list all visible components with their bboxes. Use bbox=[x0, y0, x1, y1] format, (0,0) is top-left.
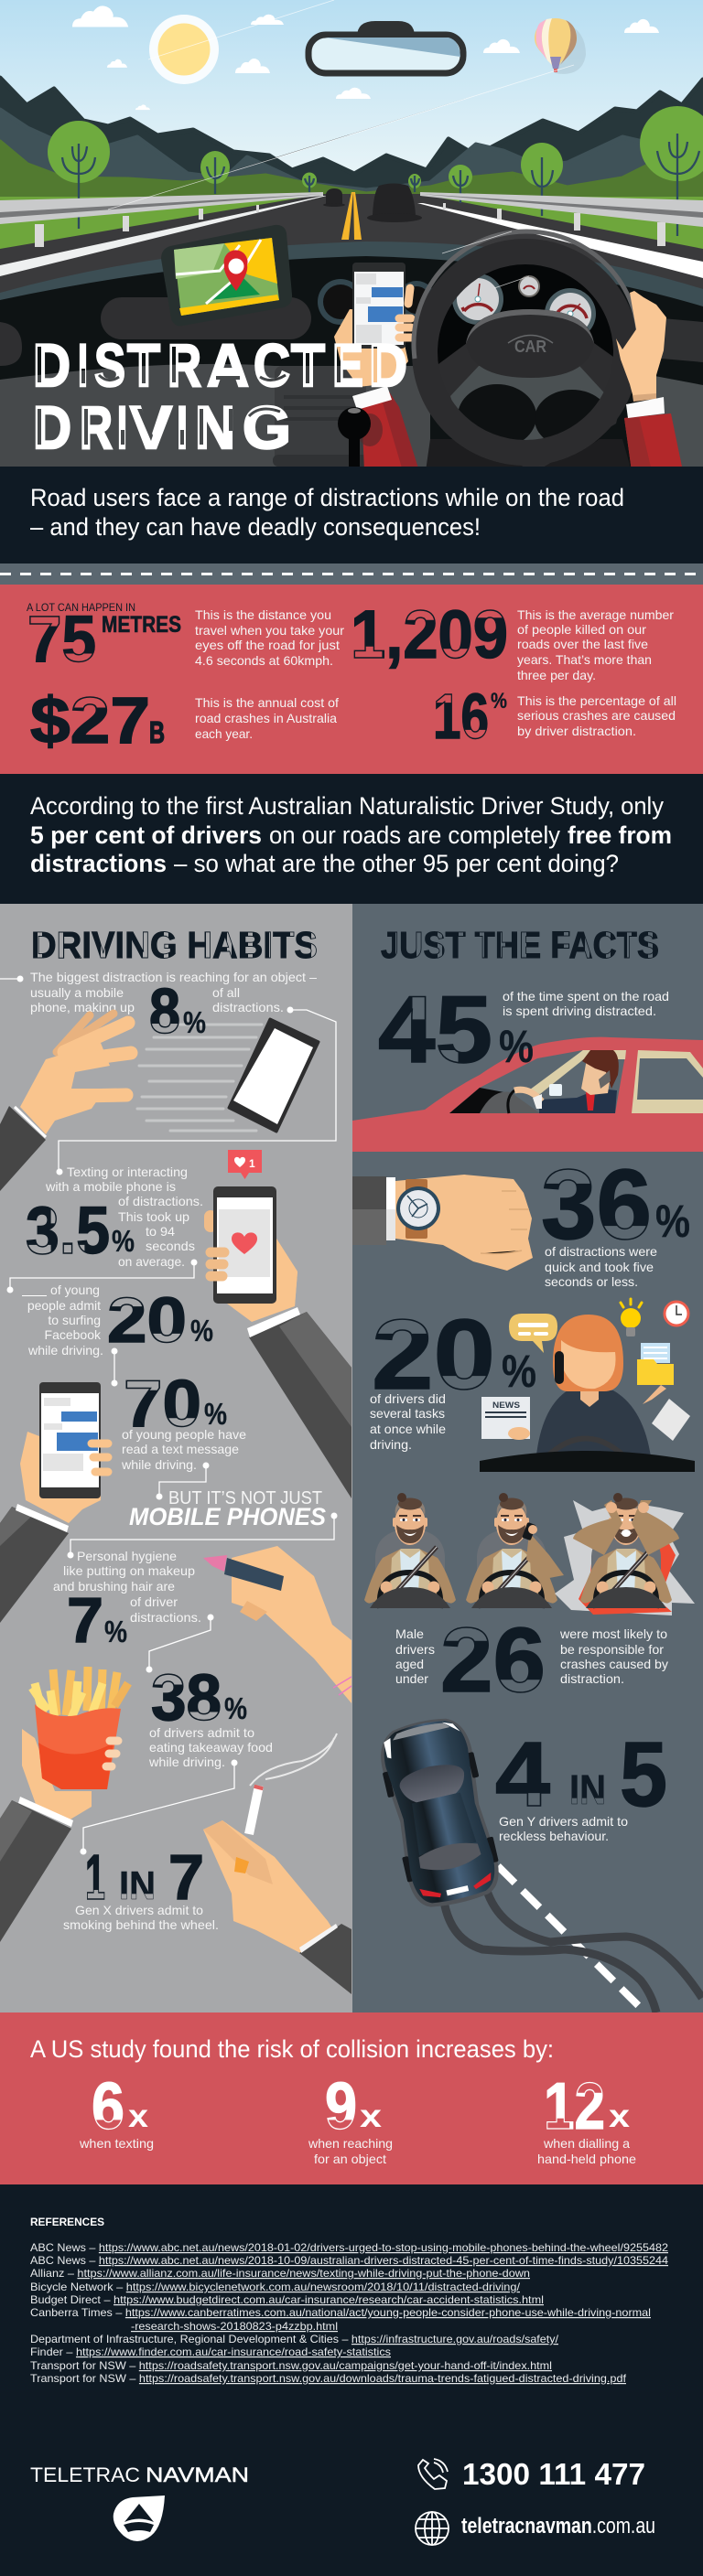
stat: 45%: 45 bbox=[378, 977, 492, 1083]
references: ABC News – https://www.abc.net.au/news/2018-10-09/australian-drivers-distracted-45-per-cent-of-time-finds-study/10355244 bbox=[30, 2254, 668, 2267]
stat: takeaway food 38%: while driving. bbox=[148, 1755, 225, 1769]
stat: personal hygiene 7%: % bbox=[104, 1615, 127, 1648]
stat: 9x when reaching: when reaching bbox=[308, 2136, 393, 2151]
study text bbox=[30, 792, 672, 877]
icon: hand with wrist watch bbox=[352, 1175, 533, 1271]
icon: clouds bbox=[72, 5, 659, 110]
icon: lipstick in hand bbox=[203, 1546, 352, 1703]
stat: $27B: $27 bbox=[30, 685, 150, 757]
title: D bbox=[33, 331, 70, 399]
stat: texting 3.5%: Texting or interacting bbox=[67, 1165, 188, 1179]
stat: male drivers under 26: were most likely to bbox=[559, 1626, 667, 1641]
icon: phone in hand reading text bbox=[0, 1382, 108, 1623]
intro text: – and they can have deadly consequences! bbox=[30, 513, 481, 541]
stat: 20% multitasking bbox=[370, 1299, 536, 1452]
icon: phone bbox=[418, 2459, 448, 2489]
icon: gauges bbox=[318, 279, 436, 325]
icon: cigarette in hand bbox=[203, 1733, 352, 1994]
icon: right hand and sleeve bbox=[616, 291, 683, 471]
stat: personal hygiene 7%: Personal hygiene bbox=[77, 1549, 177, 1563]
stat: 20% multitasking: at once while bbox=[370, 1422, 446, 1436]
title: T bbox=[291, 331, 325, 399]
stat: 75 metres: travel when you take your bbox=[195, 623, 344, 638]
stat: 4 in 5 bbox=[495, 1723, 667, 1843]
stat: 75 metres: 75 bbox=[27, 604, 96, 676]
stat: smoking 1 in 7 bbox=[63, 1841, 219, 1932]
stat: 36%: quick and took five bbox=[545, 1260, 654, 1274]
icon: car from above bbox=[373, 1712, 506, 1913]
stat: 12x when dialling: when dialling a bbox=[543, 2136, 630, 2151]
stat: texting 3.5%: % bbox=[112, 1224, 135, 1258]
stat: personal hygiene 7%: and brushing hair are bbox=[53, 1579, 175, 1594]
stat: Facebook 20%: 20 bbox=[107, 1284, 187, 1356]
references: Budget Direct – https://www.budgetdirect.com.au/car-insurance/research/car-accident-statistics.html bbox=[30, 2293, 544, 2306]
logo: Teletrac Navman wordmark: TELETRAC bbox=[30, 2463, 140, 2486]
stat: 16%: % bbox=[491, 689, 507, 714]
stat: Facebook 20%: Facebook bbox=[45, 1327, 102, 1342]
stat: smoking 1 in 7: Gen X drivers admit to bbox=[75, 1903, 203, 1917]
title: I bbox=[78, 331, 88, 399]
references: -research-shows-20180823-p4zzbp.html bbox=[131, 2320, 338, 2333]
stat: 1,209: 1,209 bbox=[351, 596, 508, 672]
panel: headline statistics bbox=[0, 585, 703, 774]
guard rails bbox=[0, 192, 703, 247]
icon: phone with heart notification: 1 bbox=[249, 1157, 255, 1170]
driver on phone bbox=[466, 1493, 564, 1608]
stat: Facebook 20%: to surfing bbox=[48, 1313, 101, 1327]
stat: takeaway food 38%: eating takeaway food bbox=[149, 1740, 273, 1755]
driver crashing bbox=[555, 1493, 695, 1615]
icon: red car with driver on phone bbox=[352, 1037, 703, 1152]
stat: 16%: by driver distraction. bbox=[517, 724, 636, 738]
dashboard bbox=[0, 242, 703, 471]
stat: 36%: seconds or less. bbox=[545, 1274, 638, 1289]
references: Transport for NSW – https://roadsafety.transport.nsw.gov.au/downloads/trauma-trends-fatigued-distracted-driving.pdf bbox=[30, 2372, 627, 2385]
title: R bbox=[80, 393, 113, 461]
icon: reaching hand and phone bbox=[0, 1014, 319, 1191]
stat: 6x when texting bbox=[79, 2070, 154, 2151]
heading: not just mobile phones bbox=[129, 1488, 326, 1530]
logo: Teletrac Navman wordmark bbox=[30, 2463, 249, 2486]
study text: – so what are the other 95 per cent doing? bbox=[174, 850, 619, 877]
stat: male drivers under 26: 26 bbox=[440, 1609, 546, 1712]
title: A bbox=[207, 331, 249, 399]
stat: 36%: of distractions were bbox=[545, 1244, 657, 1259]
stat: texting 3.5%: to 94 bbox=[146, 1224, 175, 1239]
study text: free from bbox=[568, 821, 672, 849]
stat: personal hygiene 7%: distractions. bbox=[130, 1610, 201, 1625]
stat: 12x when dialling: x bbox=[609, 2098, 631, 2134]
stat: 20% multitasking: driving. bbox=[370, 1437, 412, 1452]
intro text bbox=[30, 484, 624, 541]
stat: 36% bbox=[541, 1149, 690, 1289]
heading: not just mobile phones: BUT IT’S NOT JUST bbox=[168, 1488, 322, 1508]
stat: 20% multitasking: of drivers did bbox=[370, 1391, 446, 1406]
stat: 6x when texting: x bbox=[128, 2098, 149, 2134]
stat: smoking 1 in 7: 1 bbox=[85, 1841, 105, 1913]
stat: texting 3.5%: with a mobile phone is bbox=[45, 1179, 176, 1194]
stat: texting 3.5% bbox=[26, 1165, 203, 1269]
trees bbox=[48, 106, 703, 236]
stat: 70% read a text: read a text message bbox=[122, 1442, 239, 1456]
icon: phone with heart notification bbox=[204, 1150, 352, 1498]
stat: $27B: This is the annual cost of bbox=[195, 695, 339, 710]
stat: 8 percent bbox=[149, 975, 206, 1046]
stat: personal hygiene 7%: of driver bbox=[130, 1594, 178, 1609]
stat: 8 percent: 8 bbox=[149, 975, 180, 1046]
stat: 12x when dialling bbox=[537, 2070, 636, 2166]
icon: steering wheel: CAR bbox=[514, 338, 546, 356]
stat: male drivers under 26: crashes caused by bbox=[560, 1657, 668, 1671]
stat: 45%: % bbox=[499, 1021, 534, 1072]
stat: male drivers under 26: be responsible for bbox=[560, 1642, 664, 1657]
stat: smoking 1 in 7: IN bbox=[119, 1863, 156, 1908]
stat: 75 metres: 4.6 seconds at 60kmph. bbox=[195, 653, 333, 668]
panel: naturalistic driver study bbox=[0, 774, 703, 904]
references: Allianz – https://www.allianz.com.au/life-insurance/news/texting-while-driving-put-the-phone-down bbox=[30, 2267, 530, 2280]
stat: 70% read a text: of young people have bbox=[122, 1427, 246, 1442]
stat: 4 in 5: Gen Y drivers admit to bbox=[499, 1814, 628, 1829]
ground bbox=[0, 197, 703, 274]
references: Transport for NSW – https://roadsafety.transport.nsw.gov.au/campaigns/get-your-hand-off-it/index.html bbox=[30, 2359, 552, 2372]
panel: collision risk bbox=[0, 2012, 703, 2184]
stat: 36%: % bbox=[655, 1196, 690, 1247]
stat: 4 in 5: IN bbox=[569, 1766, 606, 1813]
heading: JUST THE FACTS bbox=[381, 924, 659, 966]
phone number: 1300 111 477 bbox=[462, 2457, 645, 2491]
stat: takeaway food 38% bbox=[148, 1662, 273, 1769]
icon: steering wheel bbox=[414, 231, 638, 473]
title: N bbox=[195, 393, 235, 461]
stat: texting 3.5%: on average. bbox=[118, 1254, 185, 1269]
stat: 70% read a text bbox=[121, 1368, 246, 1472]
intro text: Road users face a range of distractions while on the road bbox=[30, 484, 624, 511]
stat: 4 in 5: reckless behaviour. bbox=[499, 1829, 609, 1843]
panel: just the facts bbox=[352, 904, 703, 2012]
stat: male drivers under 26: under bbox=[395, 1671, 428, 1686]
stat: texting 3.5%: of distractions. bbox=[118, 1194, 203, 1208]
logo: Teletrac Navman emblem bbox=[114, 2496, 165, 2541]
stat: takeaway food 38%: % bbox=[224, 1691, 247, 1725]
title: E bbox=[332, 331, 363, 399]
stat: texting 3.5%: seconds bbox=[146, 1239, 195, 1253]
icon: sun bbox=[149, 15, 219, 84]
stat: 12x when dialling: hand-held phone bbox=[537, 2152, 636, 2166]
title: C bbox=[254, 331, 290, 399]
stat: 75 metres: METRES bbox=[102, 612, 181, 638]
stat: reaching 8%: usually a mobile bbox=[30, 985, 124, 1000]
stat: 9x when reaching: 9 bbox=[325, 2070, 357, 2143]
heading: not just mobile phones: MOBILE PHONES bbox=[129, 1503, 326, 1530]
stat: 45%: is spent driving distracted. bbox=[503, 1004, 656, 1018]
icon: hot air balloon bbox=[535, 18, 586, 74]
stat: Facebook 20%: of young bbox=[50, 1283, 100, 1297]
references: Bicycle Network – https://www.bicyclenetwork.com.au/newsroom/2018/10/11/distracted-driving/ bbox=[30, 2281, 521, 2293]
study text: distractions bbox=[30, 850, 167, 877]
title: D bbox=[369, 331, 407, 399]
panel: intro band bbox=[0, 467, 703, 564]
stat: Facebook 20%: % bbox=[190, 1314, 213, 1347]
stat: 1,209: roads over the last five bbox=[517, 637, 648, 651]
stat: takeaway food 38%: of drivers admit to bbox=[149, 1725, 254, 1740]
title: V bbox=[130, 393, 172, 461]
stat: 4 in 5: 5 bbox=[620, 1723, 667, 1826]
icon: multitasking woman driver: NEWS bbox=[492, 1401, 520, 1410]
stat: $27B: each year. bbox=[195, 726, 253, 741]
panel: references and footer bbox=[0, 2184, 703, 2576]
stat: reaching 8% bbox=[30, 970, 317, 1014]
stat: $27B: road crashes in Australia bbox=[195, 711, 337, 725]
title: D bbox=[33, 393, 71, 461]
heading: A US study found the risk of collision increases by: bbox=[30, 2035, 554, 2063]
connector lines bbox=[0, 975, 337, 1855]
icon: three male drivers bbox=[364, 1493, 695, 1615]
stat: personal hygiene 7%: 7 bbox=[67, 1584, 103, 1656]
references: Canberra Times – https://www.canberratimes.com.au/national/act/young-people-consider-phone-use-while-driving-normal bbox=[30, 2306, 651, 2319]
sleeve: left arm bbox=[352, 386, 419, 471]
stat: 1,209: of people killed on our bbox=[517, 622, 646, 637]
stat: 16%: serious crashes are caused bbox=[517, 708, 676, 723]
stat: 1,209: This is the average number bbox=[517, 607, 674, 622]
stat: 75 metres: eyes off the road for just bbox=[195, 638, 340, 652]
icon: rear view mirror bbox=[308, 21, 463, 73]
stat: 9x when reaching: for an object bbox=[314, 2152, 386, 2166]
road bbox=[0, 194, 703, 329]
stat: Facebook 20% bbox=[27, 1283, 213, 1358]
stat: male drivers under 26: distraction. bbox=[560, 1671, 624, 1686]
icon: fries in hand bbox=[0, 1667, 128, 1942]
study text: 5 per cent of drivers bbox=[30, 821, 262, 849]
stat: smoking 1 in 7: 7 bbox=[168, 1841, 204, 1913]
stat: male drivers under 26: Male bbox=[395, 1626, 424, 1641]
stat: reaching 8%: The biggest distraction is reaching for an object – bbox=[30, 970, 317, 984]
stat: 20% multitasking: % bbox=[502, 1346, 536, 1397]
stat: 4 in 5: 4 bbox=[495, 1723, 550, 1826]
stat: smoking 1 in 7: smoking behind the wheel. bbox=[63, 1917, 219, 1932]
title: G bbox=[243, 393, 291, 461]
icon: gear stick bbox=[338, 407, 383, 471]
stat: 9x when reaching: x bbox=[360, 2098, 383, 2134]
stat: 75 metres: A LOT CAN HAPPEN IN bbox=[27, 601, 135, 614]
stat: 6x when texting: when texting bbox=[79, 2136, 154, 2151]
title: T bbox=[127, 331, 160, 399]
driver attentive bbox=[364, 1493, 456, 1608]
stat: 75 metres bbox=[27, 601, 344, 676]
stat: $27B: B bbox=[149, 715, 165, 749]
stat: 36%: 36 bbox=[541, 1149, 652, 1261]
study text: on our roads are completely bbox=[269, 821, 560, 849]
references: Department of Infrastructure, Regional Development & Cities – https://infrastructure.gov.au/roads/safety/ bbox=[30, 2333, 559, 2345]
road divider band bbox=[0, 564, 703, 585]
stat: male drivers under 26 bbox=[395, 1609, 668, 1712]
stat: 20% multitasking: 20 bbox=[372, 1299, 495, 1411]
stat: male drivers under 26: aged bbox=[395, 1657, 424, 1671]
website: teletracnavman.com.au bbox=[461, 2514, 655, 2538]
icon: multitasking woman driver bbox=[480, 1299, 695, 1472]
stat: 16%: This is the percentage of all bbox=[517, 693, 676, 708]
sky bbox=[0, 0, 703, 197]
stat: reaching 8%: phone, making up bbox=[30, 1000, 135, 1014]
icon: cars ahead bbox=[323, 183, 422, 222]
references: Finder – https://www.finder.com.au/car-insurance/road-safety-statistics bbox=[30, 2345, 391, 2358]
heading: DRIVING HABITS bbox=[31, 924, 318, 966]
panel: driving habits bbox=[0, 904, 352, 2012]
title: S bbox=[94, 331, 125, 399]
references: ABC News – https://www.abc.net.au/news/2018-01-02/drivers-urged-to-stop-using-mobile-phones-behind-the-wheel/9255482 bbox=[30, 2241, 668, 2254]
study text: According to the first Australian Naturalistic Driver Study, only bbox=[30, 792, 664, 820]
panel: hero windscreen scene bbox=[0, 0, 703, 473]
stat: 45% bbox=[378, 977, 669, 1083]
stat: 1,209: three per day. bbox=[517, 668, 596, 682]
icon: phone in hand bbox=[334, 263, 411, 387]
stat: 8 percent: % bbox=[183, 1005, 206, 1039]
references bbox=[30, 2216, 668, 2385]
title: I bbox=[117, 393, 127, 461]
references: REFERENCES bbox=[30, 2216, 104, 2228]
stat: 70% read a text: 70 bbox=[124, 1368, 201, 1441]
stat: 70% read a text: % bbox=[204, 1397, 227, 1431]
stat: reaching 8%: distractions. bbox=[212, 1000, 284, 1014]
stat: 70% read a text: while driving. bbox=[121, 1457, 197, 1472]
windscreen reflections bbox=[108, 0, 574, 288]
stat: 16% bbox=[433, 681, 676, 752]
stat: 1,209 bbox=[351, 596, 674, 682]
stat: 16%: 16 bbox=[433, 681, 489, 752]
stat: Facebook 20%: while driving. bbox=[27, 1343, 103, 1358]
stat: 6x when texting: 6 bbox=[92, 2070, 124, 2143]
icon: sat nav bbox=[161, 225, 292, 326]
stat: 12x when dialling: 12 bbox=[544, 2070, 605, 2143]
stat: texting 3.5%: 3.5 bbox=[26, 1194, 110, 1268]
stat: personal hygiene 7%: like putting on makeup bbox=[63, 1563, 195, 1578]
icon: globe bbox=[416, 2512, 449, 2545]
stat: 20% multitasking: several tasks bbox=[370, 1406, 445, 1421]
stat: male drivers under 26: drivers bbox=[395, 1642, 435, 1657]
stat: Facebook 20%: people admit bbox=[27, 1298, 101, 1313]
stat: 9x when reaching bbox=[308, 2070, 393, 2166]
stat: 75 metres: This is the distance you bbox=[195, 607, 331, 622]
title: R bbox=[168, 331, 201, 399]
icon: skid marks and road line bbox=[443, 1866, 702, 2012]
stat: texting 3.5%: This took up bbox=[118, 1209, 189, 1224]
title: I bbox=[177, 393, 188, 461]
stat: 1,209: years. That’s more than bbox=[517, 652, 652, 667]
mountains bbox=[0, 78, 703, 206]
stat: personal hygiene 7% bbox=[53, 1549, 201, 1656]
stat: 45%: of the time spent on the road bbox=[503, 989, 669, 1004]
stat: reaching 8%: of all bbox=[212, 985, 240, 1000]
logo: Teletrac Navman wordmark: NAVMAN bbox=[146, 2463, 249, 2486]
stat: takeaway food 38%: 38 bbox=[151, 1662, 222, 1734]
stat: $27B bbox=[30, 685, 339, 757]
